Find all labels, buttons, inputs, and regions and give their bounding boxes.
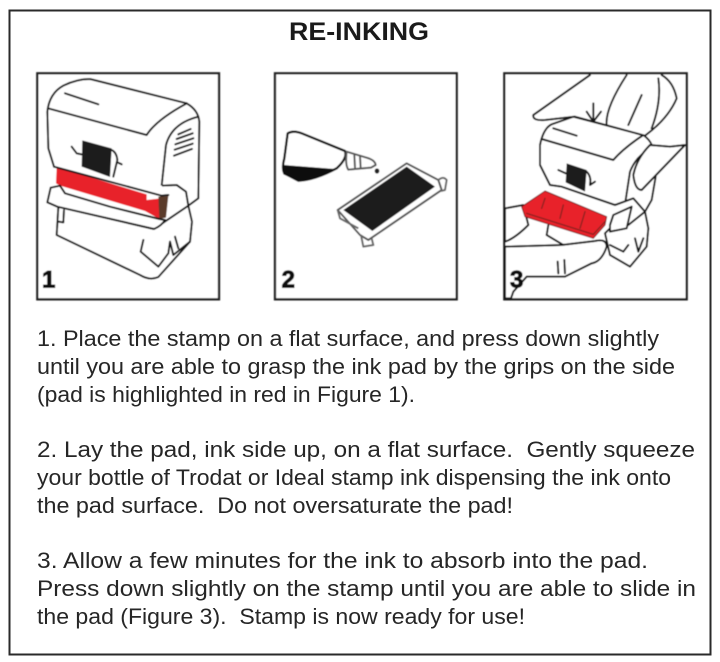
panel: figure 1 stamp with red ink pad [37, 73, 219, 299]
text block: step 3: 3. Allow a few minutes for the ink to absorb into the pad. [37, 548, 648, 573]
icon: hand pressing top [533, 75, 677, 136]
title: RE-INKING [289, 18, 429, 46]
icon: stamp window [558, 163, 595, 192]
icon: lower hand [505, 205, 607, 298]
icon: ink bottle [283, 132, 376, 181]
icon: stamp collar [610, 207, 632, 232]
text block: step 2 [37, 437, 695, 518]
icon: stamp base [605, 212, 648, 267]
text block: step 2: your bottle of Trodat or Ideal stamp ink dispensing the ink onto [37, 465, 671, 490]
label: 3: 3 [510, 266, 523, 293]
icon: stamp collar [47, 186, 165, 229]
icon: stamp base [57, 206, 192, 279]
icon: ink drop [375, 168, 379, 174]
text block: step 2: the pad surface. Do not oversaturate the pad! [37, 493, 513, 518]
text block: step 1: 1. Place the stamp on a flat surface, and press down slightly [37, 326, 660, 351]
label: 1: 1 [42, 266, 55, 293]
icon: red ink pad [522, 191, 607, 238]
text block: step 3: Press down slightly on the stamp until you are able to slide in [37, 576, 696, 601]
text block: step 1: until you are able to grasp the ink pad by the grips on the side [37, 354, 675, 379]
panel: figure 3 sliding in the pad [504, 73, 687, 299]
icon: ink pad [338, 163, 447, 247]
icon: red ink pad band [54, 167, 168, 219]
text block: step 1 [37, 326, 675, 407]
panel: figure 2 ink bottle and pad [275, 73, 457, 299]
text block: step 3: the pad (Figure 3). Stamp is now ready for use! [37, 604, 525, 629]
text block: step 2: 2. Lay the pad, ink side up, on a flat surface. Gently squeeze [37, 437, 695, 462]
icon: stamp upper body [47, 79, 199, 206]
icon: hand gripping right side [633, 145, 685, 190]
icon: stamp window [72, 140, 122, 177]
text block: step 3 [37, 548, 696, 629]
text block: step 1: (pad is highlighted in red in Figure 1). [37, 382, 415, 407]
label: 2: 2 [282, 266, 295, 293]
icon: stamp body [540, 117, 656, 212]
